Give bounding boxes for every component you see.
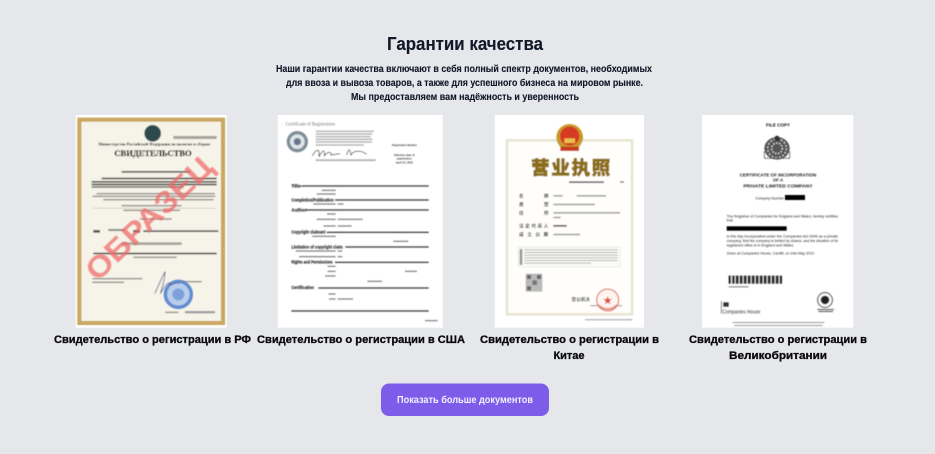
panel: UK certificate: Given at Companies House, Cardiff, on 24st May 2010 bbox=[727, 251, 814, 255]
Companies House logo bbox=[721, 301, 760, 315]
button: show more documents: Показать больше документов bbox=[397, 394, 533, 406]
intro text bbox=[276, 63, 652, 103]
panel: UK certificate: OF A bbox=[773, 178, 784, 183]
panel: China certificate: 称 bbox=[544, 192, 549, 199]
barcode bbox=[729, 276, 782, 287]
caption: China: Свидетельство о регистрации в bbox=[480, 334, 659, 346]
panel: China certificate: 登记机关 bbox=[572, 296, 591, 303]
panel: Russian certificate bbox=[76, 115, 227, 328]
panel: US certificate: Copyright claimant bbox=[291, 230, 326, 235]
panel: UK certificate: company, that the company is limited by shares, and the situation of its bbox=[727, 239, 838, 243]
panel: UK certificate: registered office is in England and Wales bbox=[727, 243, 793, 247]
panel: China certificate bbox=[495, 115, 644, 328]
caption: United Kingdom: Свидетельство о регистрации в bbox=[689, 334, 867, 346]
panel: US certificate: Author bbox=[291, 207, 307, 212]
royal crest bbox=[764, 136, 790, 160]
caption: United Kingdom bbox=[689, 334, 867, 362]
panel: China certificate: 住 bbox=[519, 210, 524, 216]
intro text: для ввоза и вывоза товаров, а также для успешного бизнеса на мировом рынке. bbox=[286, 77, 643, 89]
panel: US certificate: Certificate of Registration bbox=[286, 123, 336, 128]
caption: United Kingdom: Великобритании bbox=[729, 350, 827, 362]
panel: US certificate: April 15, 2015 bbox=[396, 160, 413, 164]
panel: China certificate: 营业执照 bbox=[531, 157, 611, 178]
caption: USA: Свидетельство о регистрации в США bbox=[257, 334, 465, 346]
panel: China certificate: 类 bbox=[519, 201, 524, 208]
panel: US certificate: Completion/Publication bbox=[291, 197, 334, 202]
panel: China certificate: 所 bbox=[544, 210, 549, 217]
watermark: ОБРАЗЕЦ bbox=[79, 149, 220, 288]
panel: US certificate: registration: bbox=[397, 156, 412, 160]
panel: UK certificate: is this day incorporated under the Companies Act 2006 as a private bbox=[727, 235, 838, 239]
QR code bbox=[526, 274, 542, 292]
red stamp bbox=[597, 289, 619, 311]
panel: US certificate: Limitation of copyright claim bbox=[291, 244, 343, 249]
panel: China certificate: 名 bbox=[519, 192, 524, 199]
emblem bbox=[556, 124, 583, 151]
caption: Russia: Свидетельство о регистрации в РФ bbox=[54, 334, 251, 346]
red stamp: ★ bbox=[603, 295, 612, 305]
round seal bbox=[817, 293, 834, 312]
signature bbox=[155, 272, 180, 293]
panel: UK certificate: CERTIFICATE OF INCORPORATION bbox=[740, 172, 816, 177]
Companies House logo: Companies House bbox=[722, 309, 760, 315]
panel: China certificate: 成立日期 bbox=[519, 231, 549, 238]
caption: China bbox=[480, 334, 659, 362]
caption: China: Китае bbox=[553, 350, 585, 362]
panel: UK certificate: PRIVATE LIMITED COMPANY bbox=[743, 183, 813, 188]
intro text: Наши гарантии качества включают в себя полный спектр документов, необходимых bbox=[276, 63, 652, 75]
panel: UK certificate: FILE COPY bbox=[766, 123, 790, 128]
button: show more documents bbox=[381, 384, 549, 416]
panel: UK certificate: The Registrar of Companies for England and Wales, hereby certifies bbox=[727, 214, 838, 218]
panel: US certificate: Effective date of bbox=[394, 153, 415, 157]
panel: Russian certificate: СВИДЕТЕЛЬСТВО bbox=[114, 149, 192, 158]
panel: China certificate: 法定代表人 bbox=[519, 222, 549, 229]
panel: US certificate: Title bbox=[291, 184, 301, 189]
panel: US certificate: Certification bbox=[291, 285, 314, 290]
panel: China certificate: 型 bbox=[544, 201, 549, 207]
intro text: Мы предоставляем вам надёжность и уверенность bbox=[351, 91, 579, 103]
panel: US certificate: Registration Number bbox=[392, 143, 417, 147]
panel: US certificate bbox=[278, 115, 443, 328]
stamp bbox=[164, 280, 193, 309]
panel: UK certificate: Company Number bbox=[755, 197, 785, 201]
title: Гарантии качества bbox=[387, 34, 544, 54]
panel: Russian certificate: Министерство Российской Федерации по налогам и сборам bbox=[98, 142, 210, 147]
panel: US certificate: Rights and Permissions bbox=[291, 260, 333, 265]
panel: UK certificate bbox=[702, 115, 853, 328]
panel: UK certificate: that bbox=[727, 219, 733, 223]
